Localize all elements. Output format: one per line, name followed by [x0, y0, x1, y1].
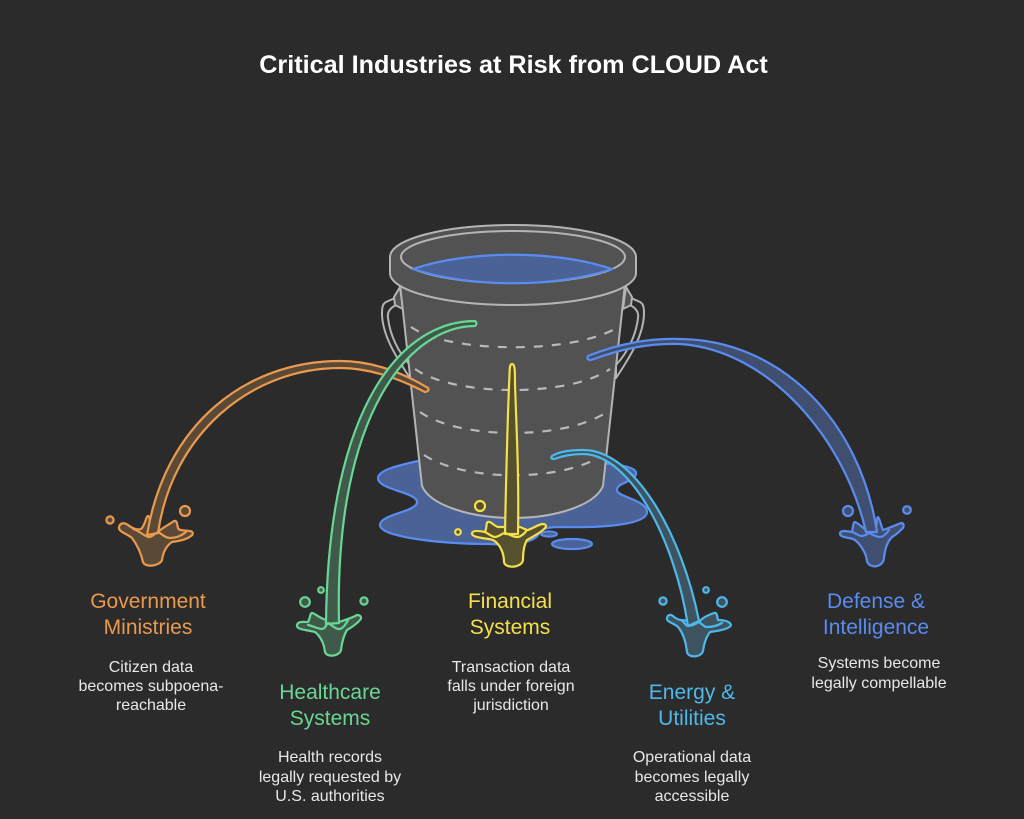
label: financial systems	[447, 590, 575, 714]
label: energy and utilities: Operational data	[633, 749, 751, 766]
label: healthcare systems: Healthcare	[279, 681, 381, 704]
label: energy and utilities: accessible	[655, 788, 729, 805]
stream and splash: healthcare systems	[297, 321, 476, 656]
label: energy and utilities: Utilities	[658, 707, 726, 730]
label: healthcare systems: Health records	[278, 749, 382, 766]
label: financial systems: Financial	[468, 590, 552, 613]
stream and splash: defense and intelligence	[587, 339, 911, 566]
label: government ministries: Citizen data	[109, 659, 193, 676]
label: financial systems: Systems	[470, 616, 550, 639]
water surface	[413, 255, 612, 283]
label: government ministries: Government	[90, 590, 206, 613]
label: defense and intelligence	[811, 590, 947, 692]
label: government ministries: Ministries	[104, 616, 192, 639]
label: defense and intelligence: legally compellable	[811, 675, 947, 692]
label: healthcare systems: U.S. authorities	[275, 788, 385, 805]
label: healthcare systems: Systems	[290, 707, 370, 730]
label: healthcare systems	[259, 681, 401, 805]
label: government ministries	[79, 590, 223, 714]
title: Critical Industries at Risk from CLOUD Act	[259, 51, 768, 79]
label: government ministries: reachable	[116, 697, 186, 714]
small puddle drop	[552, 539, 592, 549]
inner rim	[401, 231, 625, 283]
label: energy and utilities: Energy &	[649, 681, 735, 704]
label: government ministries: becomes subpoena-	[79, 678, 223, 695]
bucket	[382, 225, 644, 518]
bucket body	[400, 284, 625, 518]
label: defense and intelligence: Defense &	[827, 590, 925, 613]
label: energy and utilities	[633, 681, 751, 805]
label: financial systems: Transaction data	[452, 659, 570, 676]
left handle	[382, 298, 410, 378]
stream and splash: government ministries	[106, 361, 429, 566]
right handle	[616, 298, 644, 378]
label: financial systems: jurisdiction	[472, 697, 549, 714]
label: financial systems: falls under foreign	[447, 678, 575, 695]
label: energy and utilities: becomes legally	[635, 769, 749, 786]
label: defense and intelligence: Intelligence	[823, 616, 929, 639]
handle lugs	[394, 287, 403, 309]
puddle	[378, 461, 647, 544]
right handle lug	[623, 287, 632, 309]
label: defense and intelligence: Systems become	[818, 655, 940, 672]
bucket rim	[390, 225, 636, 305]
dashed bands	[411, 327, 618, 475]
label: healthcare systems: legally requested by	[259, 769, 401, 786]
stream and splash: energy and utilities	[551, 450, 731, 656]
stream and splash: financial systems	[455, 364, 546, 567]
tiny puddle drop	[541, 531, 557, 537]
